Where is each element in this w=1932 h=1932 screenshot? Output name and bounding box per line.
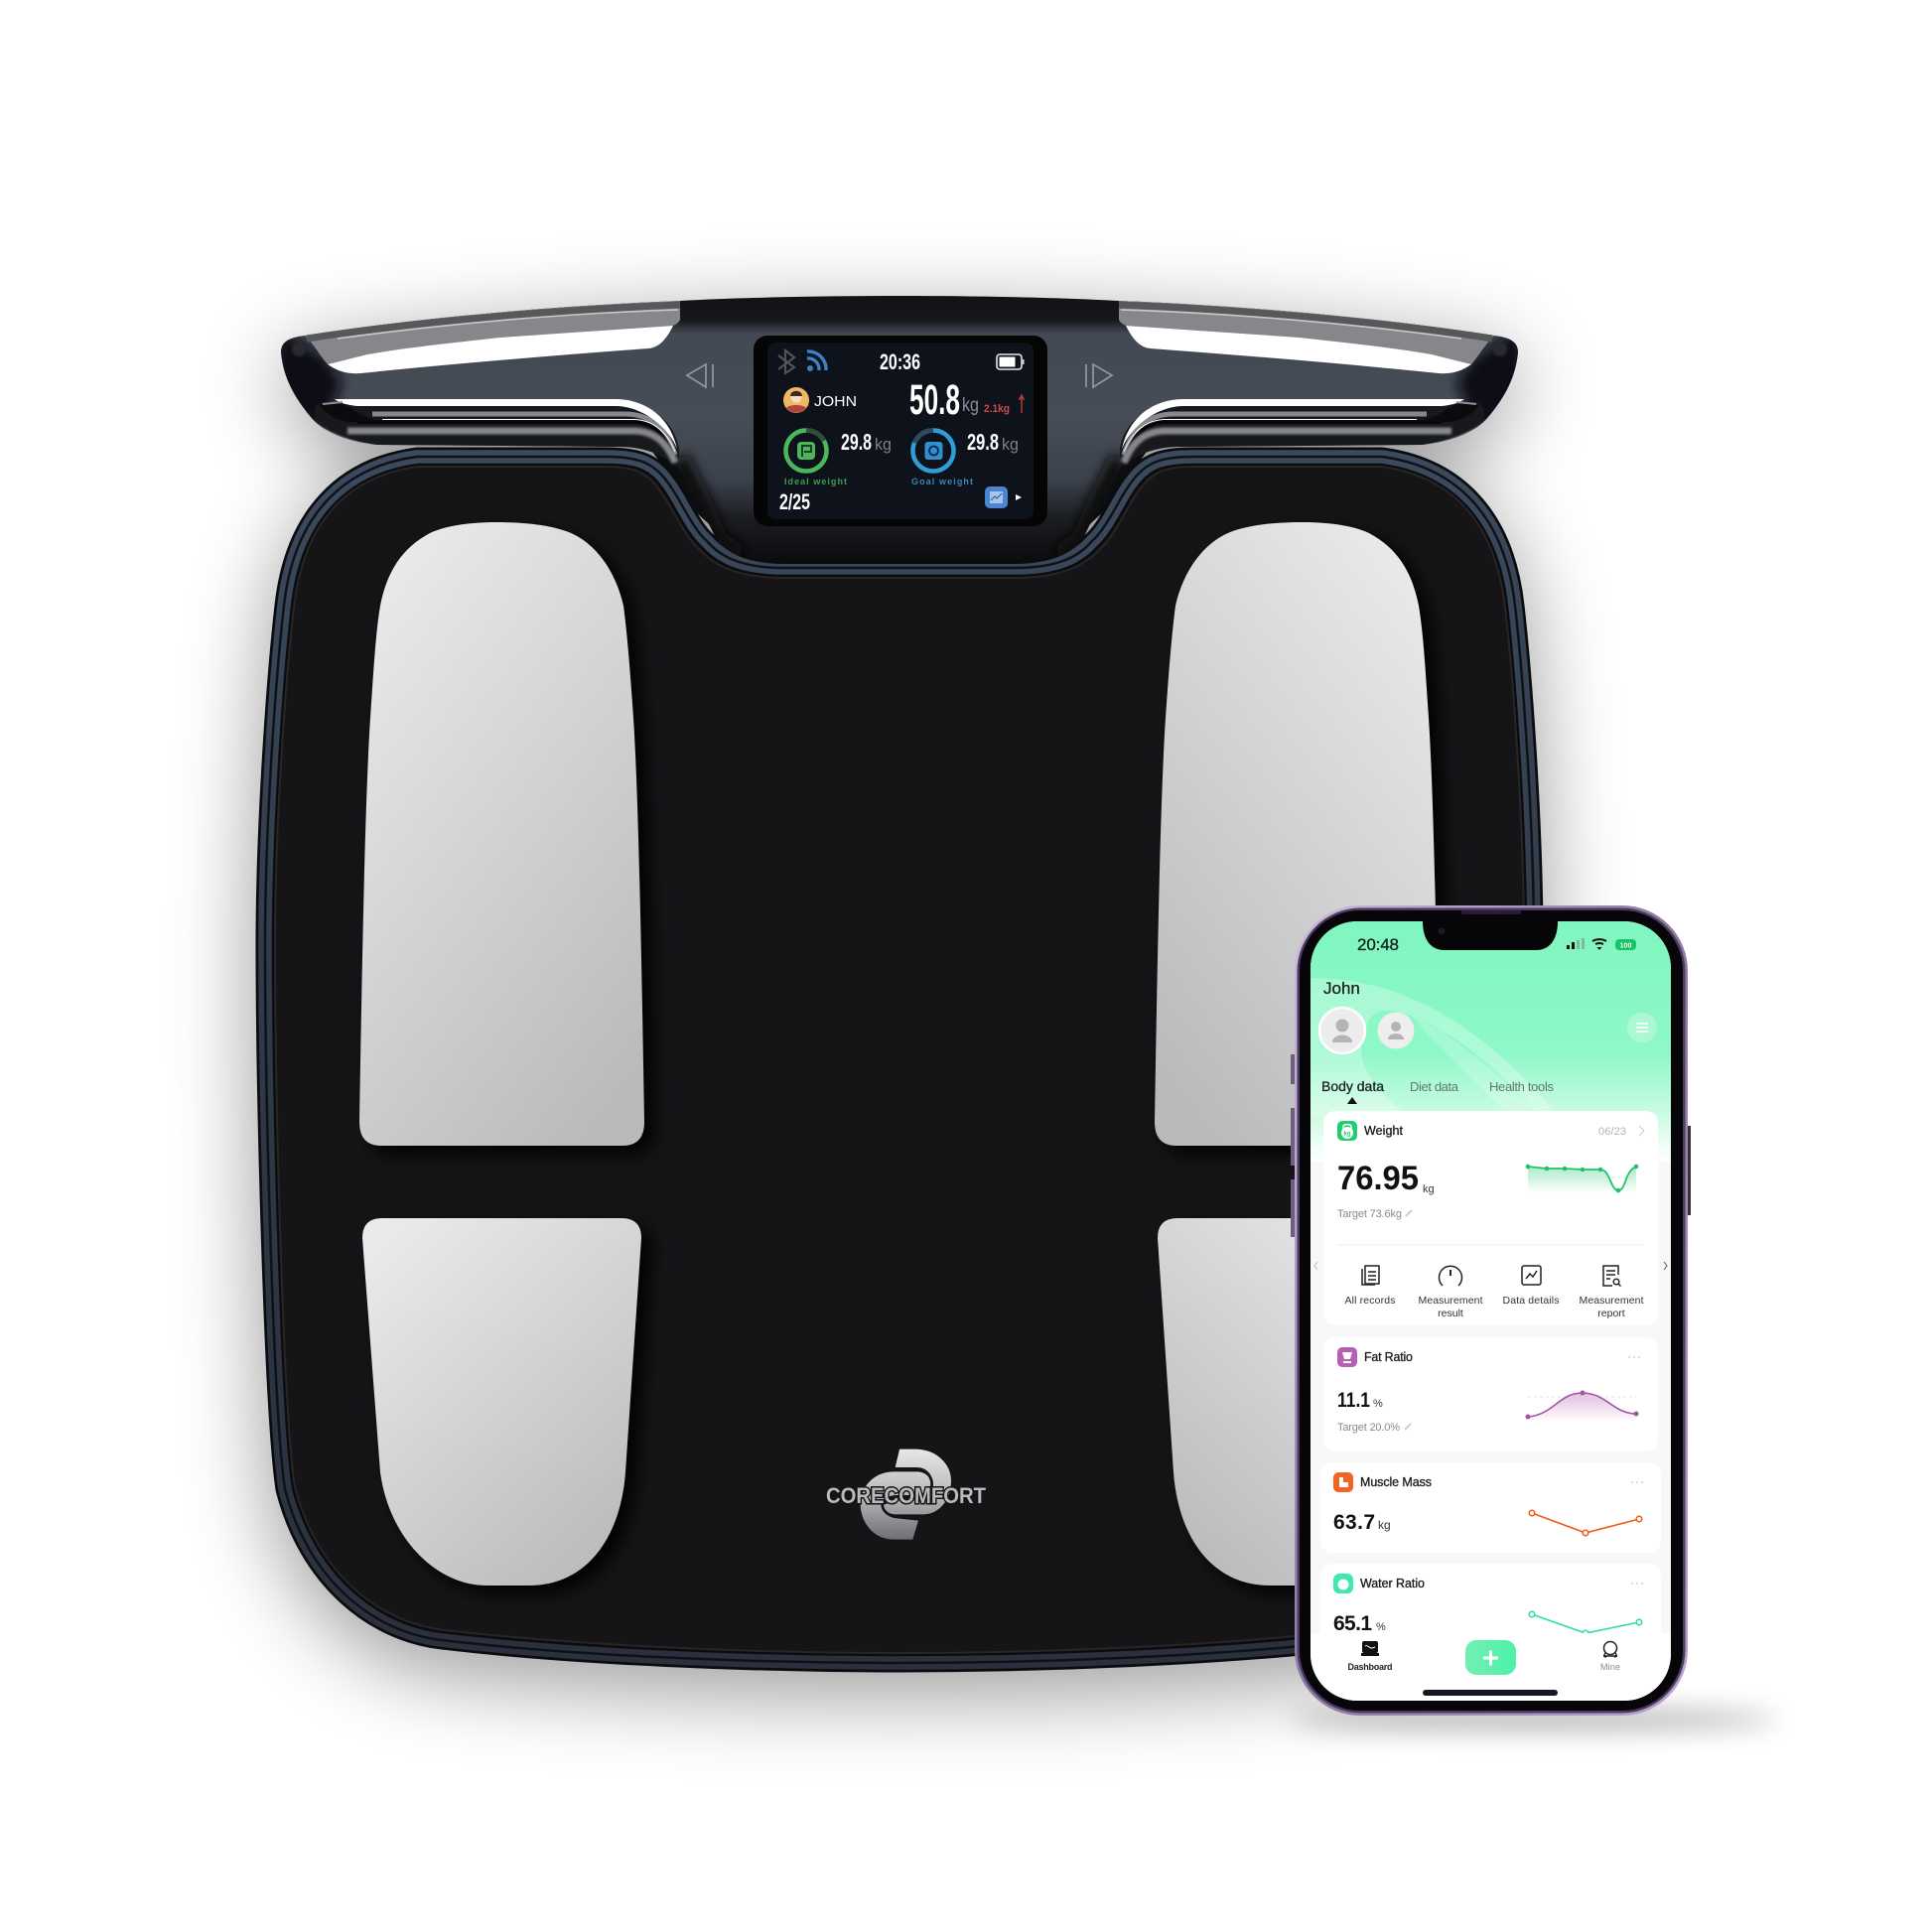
shortcut: data details (1503, 1266, 1559, 1307)
dashboard label: Dashboard (1348, 1662, 1392, 1672)
smart scale (265, 296, 1534, 1663)
icon: signal (807, 351, 826, 371)
water ratio line chart (1529, 1611, 1642, 1636)
icon: edit target (1405, 1424, 1411, 1430)
bottom-left metal foot electrode (362, 1218, 651, 1593)
icon: fat ratio (1337, 1347, 1357, 1367)
more dots (1628, 1356, 1641, 1358)
ring: ideal weight (786, 430, 826, 471)
page indicator: 2/25 (779, 489, 810, 514)
shortcut: all records: All records (1344, 1295, 1396, 1307)
muscle mass title: Muscle Mass (1360, 1475, 1432, 1489)
mine label: Mine (1600, 1662, 1620, 1672)
logo wordmark: CORECOMFORT (826, 1483, 987, 1508)
shortcut: data details: Data details (1503, 1295, 1559, 1307)
bottom-right metal foot electrode (1158, 1218, 1447, 1593)
fat ratio value: 11.1 (1337, 1389, 1370, 1412)
green header (1311, 921, 1671, 1162)
card: water ratio (1320, 1564, 1661, 1654)
more dots (1631, 1481, 1644, 1483)
weight date: 06/23 (1598, 1126, 1626, 1138)
shortcut: measurement report: Measurement (1579, 1295, 1644, 1307)
icon: water ratio (1333, 1574, 1353, 1593)
muscle mass line chart (1529, 1510, 1642, 1536)
status time: 20:48 (1357, 935, 1399, 954)
weight target: Target 73.6kg (1337, 1208, 1402, 1220)
weight title: Weight (1364, 1124, 1404, 1138)
avatar secondary (1378, 1013, 1414, 1048)
shortcut: measurement result: result (1438, 1308, 1463, 1319)
goal weight unit: kg (1002, 435, 1019, 454)
icon: battery (997, 354, 1025, 369)
user name: JOHN (814, 393, 857, 410)
weight change: 2.1kg (984, 403, 1010, 415)
top-left metal foot electrode (359, 522, 654, 1154)
shortcut: measurement result: Measurement (1418, 1295, 1483, 1307)
goal weight label: Goal weight (911, 477, 973, 486)
tab health tools: Health tools (1489, 1079, 1555, 1094)
bottom tab bar (1311, 1633, 1671, 1701)
icon: left arrow button (687, 364, 713, 387)
clock time: 20:36 (880, 349, 920, 374)
weight reading: 50.8 (909, 376, 960, 424)
home indicator (1423, 1690, 1558, 1696)
scale drop shadow (265, 314, 1534, 1685)
user name John: John (1323, 979, 1360, 998)
carousel chevrons (1314, 1262, 1667, 1270)
icon: weight (1337, 1121, 1357, 1141)
weight unit: kg (962, 395, 979, 416)
icon: chart button (985, 486, 1008, 508)
shortcut: measurement report: report (1597, 1308, 1625, 1319)
icon: dashboard (1361, 1641, 1379, 1656)
handle bar (273, 296, 1526, 564)
icon: muscle mass (1333, 1472, 1353, 1492)
icon: user avatar (783, 387, 809, 413)
phone screen (1311, 921, 1671, 1701)
shortcut: measurement report (1579, 1266, 1644, 1319)
icon: right arrow button (1086, 364, 1112, 387)
ideal weight unit: kg (875, 435, 892, 454)
fat ratio unit: % (1373, 1398, 1383, 1410)
weight line chart (1526, 1165, 1638, 1193)
card: muscle mass (1320, 1462, 1661, 1553)
logo: CoreComfort (826, 1448, 987, 1540)
display screen (754, 336, 1047, 526)
avatar main (1319, 1008, 1365, 1053)
water ratio unit: % (1376, 1621, 1386, 1633)
tab body data: Body data (1321, 1078, 1384, 1094)
smartphone (1291, 905, 1691, 1716)
ideal weight label: Ideal weight (784, 477, 847, 486)
tab diet data: Diet data (1410, 1079, 1459, 1094)
icon: mine (1603, 1642, 1617, 1657)
water ratio title: Water Ratio (1360, 1577, 1425, 1590)
phone side buttons (1291, 1054, 1691, 1237)
card: fat ratio (1323, 1337, 1658, 1451)
muscle mass unit: kg (1378, 1518, 1391, 1532)
top-right metal foot electrode (1155, 522, 1449, 1154)
ideal weight value: 29.8 (841, 429, 872, 455)
neck backing (650, 449, 1149, 566)
fat ratio line chart (1525, 1390, 1638, 1422)
shortcut: all records (1344, 1266, 1396, 1307)
goal weight value: 29.8 (967, 429, 999, 455)
fat ratio target: Target 20.0% (1337, 1422, 1400, 1434)
status icons: 100 (1620, 943, 1631, 949)
front camera (1438, 927, 1446, 935)
menu button (1627, 1013, 1657, 1042)
shortcut: measurement result (1418, 1266, 1483, 1319)
phone frame (1295, 905, 1688, 1716)
chevron (1639, 1126, 1644, 1136)
icon: next triangle (1016, 494, 1022, 500)
scale platform body (265, 457, 1534, 1663)
phone shadow (1291, 1709, 1777, 1730)
ring: goal weight (913, 430, 953, 471)
tab marker (1347, 1097, 1357, 1104)
weight value: 76.95 (1337, 1160, 1419, 1197)
muscle mass value: 63.7 (1333, 1511, 1375, 1534)
header swoosh (1311, 978, 1559, 1117)
icon: edit target (1406, 1210, 1412, 1216)
icon: bluetooth (778, 350, 794, 373)
add button (1465, 1640, 1516, 1675)
icon: weight: kg (1343, 1132, 1351, 1138)
card: weight (1323, 1111, 1658, 1325)
notch (1423, 921, 1558, 950)
more dots (1631, 1583, 1644, 1585)
icon: up arrow (1019, 395, 1025, 413)
weight value unit: kg (1423, 1183, 1435, 1195)
water ratio value: 65.1 (1333, 1612, 1372, 1635)
status icons (1567, 938, 1636, 950)
fat ratio title: Fat Ratio (1364, 1350, 1413, 1364)
